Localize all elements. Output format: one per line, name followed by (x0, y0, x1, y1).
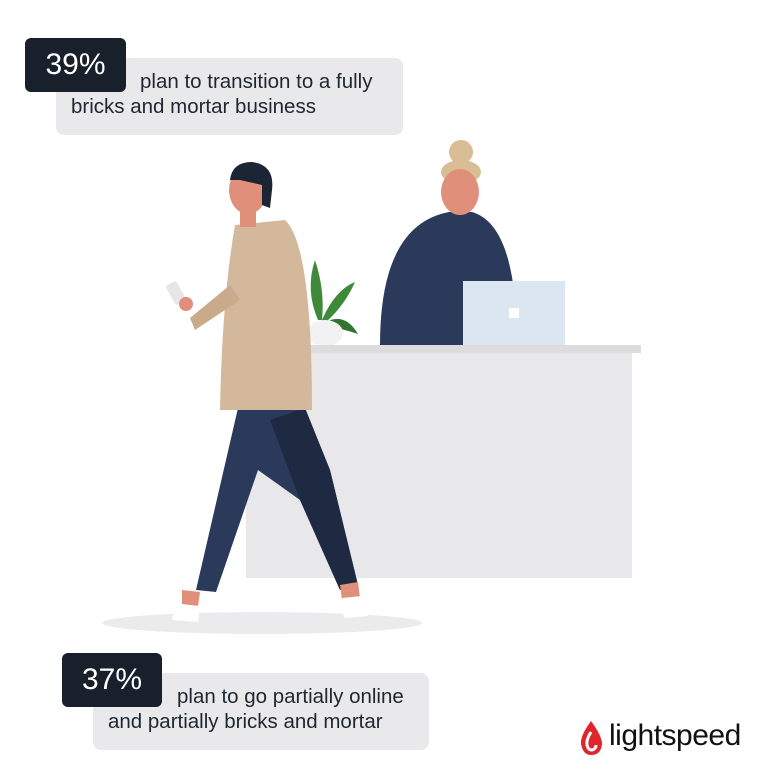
stat 37% (62, 653, 162, 707)
icon: flame (580, 721, 602, 755)
man (165, 162, 368, 622)
text (108, 685, 404, 733)
wordmark: lightspeed (609, 719, 741, 752)
counter (246, 352, 632, 578)
stat 39%: 39% (45, 48, 106, 81)
grey box (93, 673, 429, 750)
text: bricks and mortar business (71, 95, 316, 118)
text: and partially bricks and mortar (108, 710, 383, 733)
logo: lightspeed (580, 719, 741, 755)
text: plan to go partially online (177, 685, 404, 708)
text: plan to transition to a fully (140, 70, 372, 93)
text (71, 70, 372, 118)
plant (307, 260, 358, 346)
stat 37%: 37% (82, 663, 142, 696)
woman (380, 140, 517, 345)
laptop (463, 281, 565, 345)
grey box (56, 58, 403, 135)
callout: 37% (62, 653, 429, 750)
callout: 39% (25, 38, 403, 135)
shadow (102, 612, 422, 634)
stat 39% (25, 38, 126, 92)
